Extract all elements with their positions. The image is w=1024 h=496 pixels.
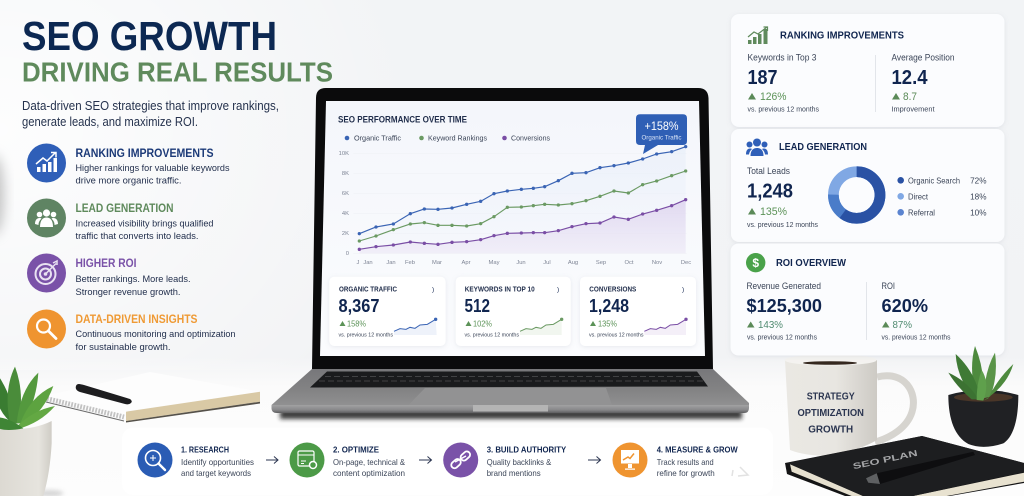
panel: ROI overview: vs. previous 12 months — [882, 335, 951, 342]
icon: dollar: $ — [752, 256, 759, 270]
step 2: optimize — [290, 442, 406, 478]
step 2: optimize: 2. OPTIMIZE — [333, 445, 379, 455]
chart legend: Organic Traffic — [354, 134, 401, 142]
KPI card: organic traffic: 158% — [347, 318, 366, 328]
KPI card: conversions: ) — [682, 286, 684, 294]
callout: +158% organic traffic: +158% — [644, 119, 679, 133]
sparkline — [520, 318, 563, 335]
step 3: build authority: 3. BUILD AUTHORITY — [487, 445, 567, 455]
chart axis labels: Aug — [568, 260, 578, 266]
panel: ranking improvements: 8.7 — [903, 91, 917, 103]
panel: ranking improvements: Improvement — [892, 106, 935, 114]
title — [22, 13, 333, 88]
step 1: research: 1. RESEARCH — [181, 445, 229, 455]
panel: lead generation: 1,248 — [747, 181, 793, 203]
chart axis labels: Sep — [596, 260, 606, 266]
pen — [76, 384, 132, 404]
panel: lead generation: LEAD GENERATION — [779, 141, 867, 153]
KPI card: conversions: CONVERSIONS — [589, 285, 636, 294]
panel: ROI overview — [730, 244, 1004, 356]
benefit: higher ROI: HIGHER ROI — [76, 258, 136, 270]
chart legend: Keyword Rankings — [428, 134, 487, 142]
arrow — [266, 456, 278, 464]
chart axis labels: J — [357, 260, 360, 266]
process bar — [122, 428, 773, 495]
chart: SEO performance over time — [338, 114, 691, 266]
benefit: ranking improvements: drive more organic traffic. — [76, 176, 182, 186]
icon: people — [746, 138, 768, 156]
KPI card: organic traffic: vs. previous 12 months — [338, 332, 393, 338]
chart axis labels: Jun — [516, 260, 526, 266]
KPI card: conversions: 1,248 — [589, 296, 629, 316]
panel: ROI overview: vs. previous 12 months — [747, 335, 817, 342]
notebook: SEO plan — [785, 436, 1024, 496]
mug text — [797, 390, 864, 436]
mug text: GROWTH — [808, 424, 853, 436]
arrow — [588, 456, 600, 464]
donut legend: 18% — [970, 192, 986, 202]
step 3: build authority: brand mentions — [487, 469, 541, 478]
chart plot lines — [353, 145, 687, 253]
KPI card: organic traffic: 8,367 — [338, 296, 380, 316]
panel: ranking improvements: 126% — [760, 91, 787, 103]
KPI card: keywords in top 10: 512 — [464, 296, 490, 316]
panel: ranking improvements — [731, 14, 1004, 127]
panel: ranking improvements: RANKING IMPROVEMENTS — [780, 30, 904, 42]
laptop screen — [320, 101, 705, 356]
plant: right — [948, 346, 1018, 447]
panel: ranking improvements: 187 — [748, 67, 778, 89]
chart axis labels: 6K — [342, 191, 349, 197]
panel: lead generation — [731, 129, 1004, 242]
panel: ranking improvements: Keywords in Top 3 — [748, 52, 816, 62]
pen — [866, 452, 975, 484]
title: SEO GROWTH — [22, 13, 277, 59]
benefit: lead generation: Increased visibility brings qualified — [76, 218, 214, 230]
panel: ranking improvements: Average Position — [892, 52, 954, 62]
laptop — [272, 88, 749, 419]
benefit: data-driven insights: for sustainable growth. — [76, 342, 170, 353]
notebook label: SEO PLAN — [852, 448, 918, 471]
benefit: data-driven insights: Continuous monitoring and optimization — [76, 329, 236, 340]
panel: ranking improvements: 12.4 — [892, 67, 928, 89]
chart axis labels: Jul — [543, 260, 551, 266]
KPI card: organic traffic — [329, 277, 446, 346]
chart axis labels: 10K — [339, 151, 349, 157]
step 2: optimize: On-page, technical & — [333, 458, 406, 467]
laptop base and keyboard — [272, 369, 749, 413]
panel: ROI overview: 87% — [892, 319, 912, 331]
icon: dollar — [746, 253, 765, 272]
KPI card: organic traffic: ORGANIC TRAFFIC — [339, 285, 398, 294]
donut legend: Organic Search — [908, 176, 960, 186]
subtitle text — [22, 98, 279, 129]
KPI card: keywords in top 10: KEYWORDS IN TOP 10 — [465, 285, 535, 294]
donut legend: Referral — [908, 208, 935, 218]
KPI card: conversions — [580, 277, 696, 346]
subtitle text: generate leads, and maximize ROI. — [22, 114, 198, 129]
benefit: lead generation: traffic that converts into leads. — [76, 231, 198, 242]
notepad and pen: left — [44, 372, 260, 422]
panel: ranking improvements: vs. previous 12 months — [748, 106, 819, 114]
step 1: research: and target keywords — [181, 469, 251, 478]
chart axis labels: 0 — [346, 251, 349, 257]
step 4: measure and grow — [612, 442, 739, 478]
title: DRIVING REAL RESULTS — [22, 56, 333, 88]
benefit: lead generation: LEAD GENERATION — [76, 203, 174, 215]
KPI card: keywords in top 10: 102% — [473, 318, 492, 328]
KPI card: conversions: vs. previous 12 months — [589, 332, 644, 338]
chart axis labels: Nov — [652, 260, 662, 266]
chart axis labels: 8K — [342, 171, 349, 177]
chart legend: Conversions — [511, 134, 550, 142]
chart axis labels: 2K — [342, 231, 349, 237]
donut legend — [897, 176, 986, 218]
panel: lead generation: 135% — [760, 206, 787, 218]
step 2: optimize: content optimization — [333, 469, 405, 478]
step 3: build authority: Quality backlinks & — [487, 458, 552, 467]
panel: lead generation: vs. previous 12 months — [747, 222, 818, 229]
donut legend: Direct — [908, 192, 929, 202]
panel: benefits list — [27, 144, 236, 353]
chart axis labels: Apr — [461, 260, 471, 266]
step 3: build authority — [443, 442, 567, 478]
KPI card: organic traffic: ) — [432, 286, 434, 294]
chart axis labels: Jan — [363, 260, 373, 266]
plant: left — [0, 367, 63, 496]
KPI card: keywords in top 10 — [456, 277, 571, 346]
KPI card: keywords in top 10: vs. previous 12 months — [464, 332, 519, 338]
donut chart — [833, 172, 880, 218]
chart title: SEO PERFORMANCE OVER TIME — [338, 114, 467, 124]
benefit: data-driven insights — [27, 310, 236, 353]
mug — [785, 354, 913, 456]
benefit: higher ROI: Better rankings. More leads. — [76, 274, 190, 285]
panel: ROI overview: Revenue Generated — [746, 281, 821, 291]
panel: lead generation: Total Leads — [747, 166, 790, 176]
chart axis labels: Dec — [681, 260, 691, 266]
chart axis labels: Mar — [432, 260, 442, 266]
panel: ROI overview: 143% — [758, 319, 783, 331]
panel: ROI overview: $125,300 — [746, 295, 822, 316]
benefit: ranking improvements: Higher rankings for valuable keywords — [76, 163, 230, 174]
callout: +158% organic traffic: Organic Traffic — [642, 136, 682, 142]
chart axis labels: May — [489, 260, 500, 266]
chart axis labels: 4K — [342, 211, 349, 217]
step 4: measure and grow: Track results and — [657, 458, 714, 467]
panel: ROI overview: 620% — [882, 295, 928, 316]
subtitle text: Data-driven SEO strategies that improve rankings, — [22, 98, 279, 113]
KPI card: conversions: 135% — [598, 318, 617, 328]
panel: ROI overview: ROI — [882, 281, 895, 291]
donut legend: 72% — [970, 176, 986, 186]
chart axis labels: Jan — [386, 260, 396, 266]
chart legend — [345, 134, 550, 142]
step 4: measure and grow: refine for growth — [657, 469, 715, 478]
panel: ROI overview: ROI OVERVIEW — [776, 257, 846, 269]
benefit: higher ROI: Stronger revenue growth. — [76, 287, 180, 298]
step 1: research — [138, 442, 254, 478]
donut legend: 10% — [970, 208, 986, 218]
benefit: ranking improvements — [27, 144, 230, 186]
chart axis labels: Oct — [624, 260, 634, 266]
chart axis labels — [339, 151, 691, 266]
callout: +158% organic traffic — [636, 114, 687, 154]
icon: growth bars — [748, 27, 768, 44]
mug text: OPTIMIZATION — [797, 407, 864, 419]
benefit: ranking improvements: RANKING IMPROVEMENTS — [76, 148, 214, 160]
sparkline — [644, 318, 688, 335]
arrow — [419, 456, 432, 464]
step 1: research: Identify opportunities — [181, 458, 254, 467]
KPI card: keywords in top 10: ) — [557, 286, 559, 294]
benefit: data-driven insights: DATA-DRIVEN INSIGHTS — [76, 314, 198, 326]
sparkline — [394, 318, 437, 335]
chart axis labels: Feb — [405, 260, 415, 266]
benefit: higher ROI — [27, 254, 190, 298]
benefit: lead generation — [27, 198, 214, 242]
mug text: STRATEGY — [807, 390, 855, 402]
step 4: measure and grow: 4. MEASURE & GROW — [657, 445, 739, 455]
laptop bezel — [312, 88, 713, 369]
